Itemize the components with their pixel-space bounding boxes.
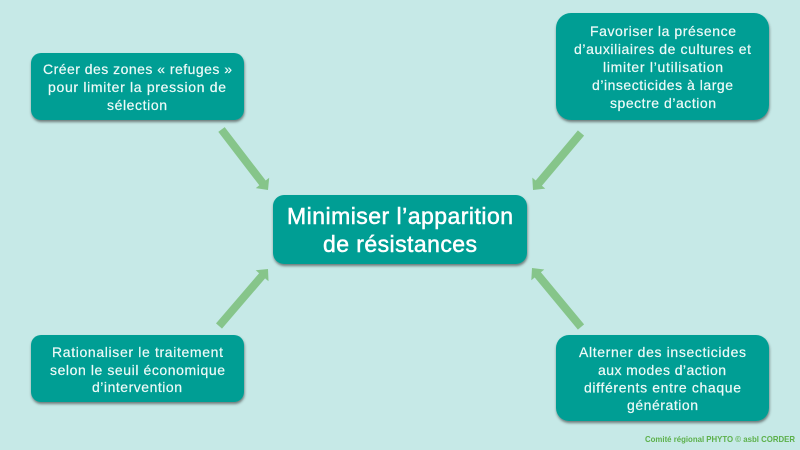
panel: auxiliaires de cultures: d’auxiliaires de cultures et bbox=[574, 41, 751, 57]
panel: rationaliser le traitement bbox=[31, 335, 244, 402]
panel: zones refuges bbox=[31, 53, 244, 120]
arrow: bottom right to centre bbox=[531, 268, 584, 330]
panel: central message: de résistances bbox=[323, 231, 477, 257]
panel: alterner des insecticides: aux modes d’action bbox=[598, 362, 726, 378]
panel: rationaliser le traitement: d’intervention bbox=[92, 379, 182, 395]
panel: zones refuges: Créer des zones « refuges » bbox=[43, 61, 232, 77]
panel: auxiliaires de cultures bbox=[556, 13, 769, 120]
panel: alterner des insecticides: Alterner des insecticides bbox=[579, 344, 746, 360]
panel: rationaliser le traitement: selon le seuil économique bbox=[50, 362, 225, 378]
arrow: top right to centre bbox=[532, 130, 584, 190]
panel: rationaliser le traitement: Rationaliser le traitement bbox=[52, 344, 223, 360]
panel: central message: Minimiser l’apparition bbox=[287, 203, 513, 229]
arrow: bottom left to centre bbox=[216, 269, 268, 329]
panel: alterner des insecticides: différents entre chaque bbox=[584, 380, 741, 396]
panel: central message bbox=[273, 195, 527, 264]
panel: zones refuges: pour limiter la pression de bbox=[48, 79, 226, 95]
panel: alterner des insecticides bbox=[556, 335, 769, 421]
panel: auxiliaires de cultures: Favoriser la présence bbox=[590, 23, 736, 39]
arrow: top left to centre bbox=[218, 127, 269, 190]
panel: auxiliaires de cultures: d’insecticides à large bbox=[592, 77, 733, 93]
panel: zones refuges: sélection bbox=[107, 97, 167, 113]
panel: auxiliaires de cultures: limiter l’utilisation bbox=[603, 59, 723, 75]
panel: auxiliaires de cultures: spectre d’action bbox=[610, 95, 716, 111]
panel: alterner des insecticides: génération bbox=[627, 397, 698, 413]
